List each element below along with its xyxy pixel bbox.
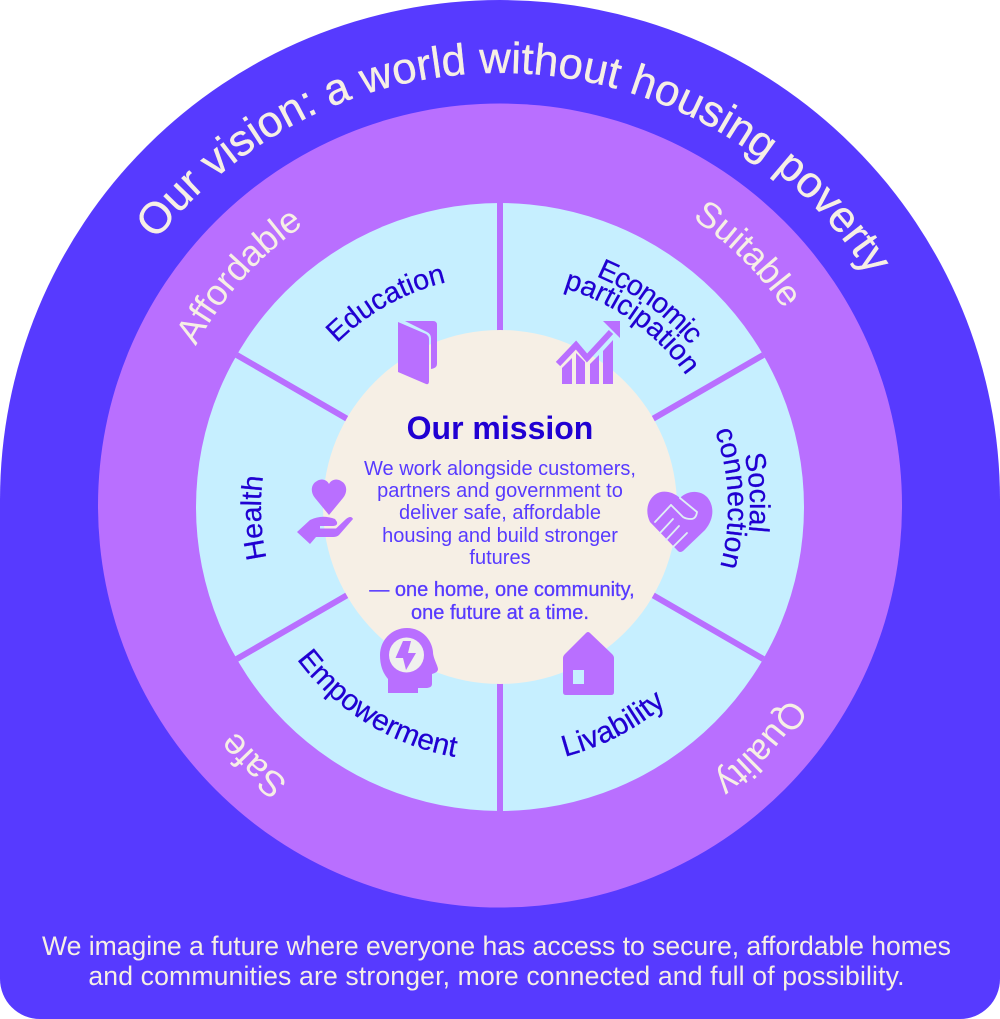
label: livability: Livability — [561, 692, 663, 756]
title: our vision: Our vision: a world without housing poverty — [139, 41, 888, 270]
label: social connection: connection — [716, 429, 748, 568]
label: social connection: Social — [746, 454, 771, 532]
wheel spokes — [237, 203, 763, 811]
label: education: Education — [325, 268, 445, 342]
panel: purple values ring — [98, 104, 902, 908]
text block: mission tagline: — one home, one community, — [369, 579, 635, 601]
heading: our mission: Our mission — [407, 410, 593, 446]
label: empowerment: Empowerment — [298, 648, 458, 757]
panel: mission circle — [323, 330, 677, 684]
text block: mission statement — [364, 458, 636, 569]
text block: vision statement — [42, 931, 951, 991]
ring label: suitable: Suitable — [696, 202, 796, 306]
label: social connection — [716, 429, 771, 568]
icon: handshake heart — [647, 492, 712, 552]
label: economic participation: participation — [563, 274, 696, 374]
text block: mission statement: partners and government to — [377, 480, 623, 502]
text block: mission statement: We work alongside customers, — [364, 458, 636, 480]
ring label: affordable: Affordable — [179, 214, 300, 346]
icon: house — [563, 632, 614, 695]
ring label: quality: Quality — [718, 704, 804, 795]
text block: mission statement: futures — [469, 547, 531, 569]
text block: vision statement: We imagine a future where everyone has access to secure, affordable homes — [42, 931, 951, 961]
label: health: Health — [240, 477, 266, 560]
text block: mission tagline — [369, 579, 635, 624]
text block: mission statement: housing and build stronger — [382, 525, 618, 547]
text block: mission statement: deliver safe, affordable — [399, 502, 601, 524]
icon: head with lightning — [380, 628, 438, 693]
label: economic participation: Economic — [598, 259, 700, 343]
icon: book — [398, 321, 437, 384]
icon: rising chart — [558, 321, 620, 384]
text block: mission tagline: one future at a time. — [411, 602, 589, 624]
panel: light blue outcomes wheel — [196, 203, 804, 811]
text block: vision statement: and communities are stronger, more connected and full of possibility. — [88, 961, 905, 991]
ring label: safe: Safe — [225, 734, 284, 796]
icon: heart in hand — [297, 480, 353, 544]
